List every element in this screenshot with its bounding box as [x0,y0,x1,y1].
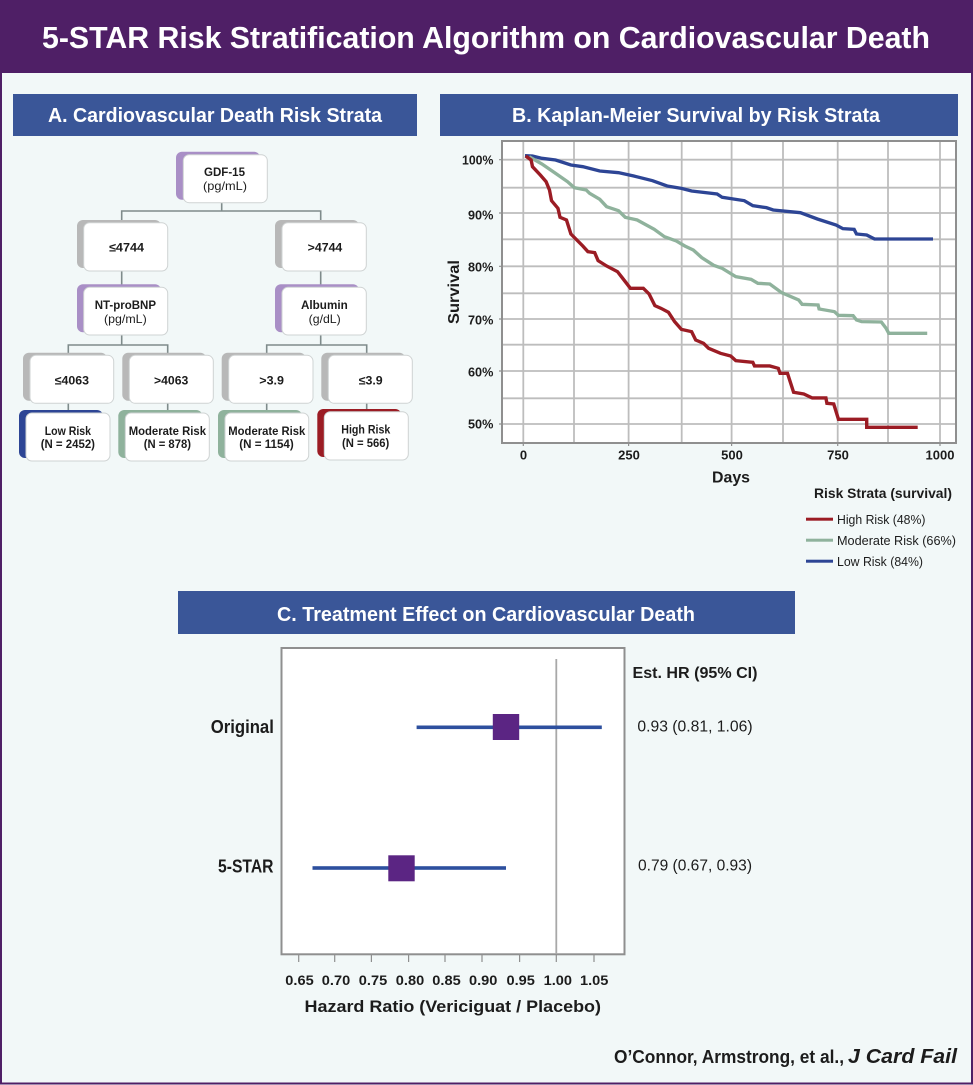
node: albumin at most 3.9 [321,353,412,403]
y axis labels [462,152,494,432]
outcome: moderate risk, N 1154: (N = 1154) [239,437,294,451]
forest x axis labels: 0.65 [285,972,314,988]
panel C: treatment effect [178,591,795,1016]
node: Albumin: (g/dL) [309,312,341,326]
node: NT-proBNP: (pg/mL) [104,312,147,326]
y axis labels: 80% [468,260,494,274]
y axis labels: 90% [468,208,494,222]
forest x axis labels: 0.80 [396,972,424,988]
x axis labels: 1000 [926,448,954,462]
legend: High Risk (48%) [837,512,925,527]
panel B heading [440,94,958,136]
y axis labels: 70% [468,312,494,328]
x axis labels: 250 [618,448,640,462]
node: Albumin [275,284,366,335]
x axis labels: 500 [721,448,743,462]
node: albumin above 3.9 [222,353,313,403]
x axis labels [520,448,954,462]
legend [806,485,956,569]
outcome: moderate risk, N 878: (N = 878) [144,437,191,451]
panel A heading [13,94,417,136]
estimate: Original: 0.93 (0.81, 1.06) [637,718,753,736]
5-STAR estimate marker [312,855,506,881]
moderate risk curve [529,157,927,333]
survival line chart [499,141,956,446]
node: GDF-15 at most 4744: ≤4744 [109,240,144,254]
outcome: low risk [19,410,110,461]
x axis labels: 0 [520,448,527,462]
node: GDF-15 above 4744 [275,220,366,271]
node: NT-proBNP above 4063 [122,353,213,403]
panel C heading: C. Treatment Effect on Cardiovascular Death [277,604,695,626]
node: GDF-15: (pg/mL) [203,179,247,193]
outcome: moderate risk, N 878: Moderate Risk [129,424,206,438]
legend: Moderate Risk (66%) [837,533,956,548]
legend: Risk Strata (survival) [814,485,952,501]
outcome: moderate risk, N 1154: Moderate Risk [228,424,306,438]
node: GDF-15 at most 4744 [77,220,168,271]
forest x axis labels: 0.90 [469,972,498,988]
forest x axis labels: 1.05 [580,972,609,988]
forest plot [282,648,624,962]
title banner [0,0,973,73]
node: albumin above 3.9: >3.9 [259,374,284,388]
y axis labels: 100% [462,152,494,168]
forest x axis labels: 0.70 [322,972,350,988]
forest x axis labels: 1.00 [544,972,572,988]
estimates column heading: Est. HR (95% CI) [632,665,758,682]
node: NT-proBNP: NT-proBNP [95,298,156,312]
outcome: moderate risk, N 1154 [218,410,309,461]
citation [614,1046,957,1068]
panel A: cardiovascular death risk strata [13,94,417,461]
x axis labels: 750 [827,448,849,462]
panel A heading: A. Cardiovascular Death Risk Strata [48,105,383,127]
forest x axis title: Hazard Ratio (Vericiguat / Placebo) [304,997,601,1016]
forest x axis labels: 0.75 [359,972,387,988]
forest x axis labels [285,972,609,988]
node: GDF-15: GDF-15 [204,165,245,179]
y axis title: Survival [446,260,463,324]
node: NT-proBNP at most 4063 [23,353,114,403]
panel B heading: B. Kaplan-Meier Survival by Risk Strata [512,105,881,127]
citation: J Card Fail [848,1046,957,1068]
outcome: low risk: (N = 2452) [41,437,95,451]
panel B: Kaplan-Meier survival [440,94,958,569]
row label: Original: Original [211,717,274,737]
decision tree connectors [68,203,367,413]
y axis labels: 60% [468,364,494,380]
forest x axis labels: 0.95 [506,972,535,988]
outcome: moderate risk, N 878 [118,410,209,461]
row label: 5-STAR: 5-STAR [218,856,274,876]
outcome: high risk: High Risk [341,422,391,436]
outcome: high risk [317,409,408,460]
outcome: high risk: (N = 566) [342,436,389,450]
forest x axis labels: 0.85 [432,972,461,988]
high risk curve [526,156,918,427]
original estimate marker [417,714,602,740]
node: NT-proBNP [77,284,168,335]
citation: O’Connor, Armstrong, et al., [614,1047,844,1067]
node: Albumin: Albumin [301,298,348,312]
estimate: 5-STAR: 0.79 (0.67, 0.93) [638,858,752,874]
outcome: low risk: Low Risk [45,424,91,438]
node: NT-proBNP above 4063: >4063 [154,374,189,388]
title banner: 5-STAR Risk Stratification Algorithm on Cardiovascular Death [42,20,930,55]
x axis title: Days [712,470,750,486]
node: NT-proBNP at most 4063: ≤4063 [55,374,89,388]
node: albumin at most 3.9: ≤3.9 [359,374,383,388]
y axis labels: 50% [468,416,494,432]
low risk curve [525,156,933,239]
legend: Low Risk (84%) [837,554,923,569]
node: GDF-15 [176,152,267,203]
node: GDF-15 above 4744: >4744 [308,240,343,254]
panel C heading [178,591,795,634]
